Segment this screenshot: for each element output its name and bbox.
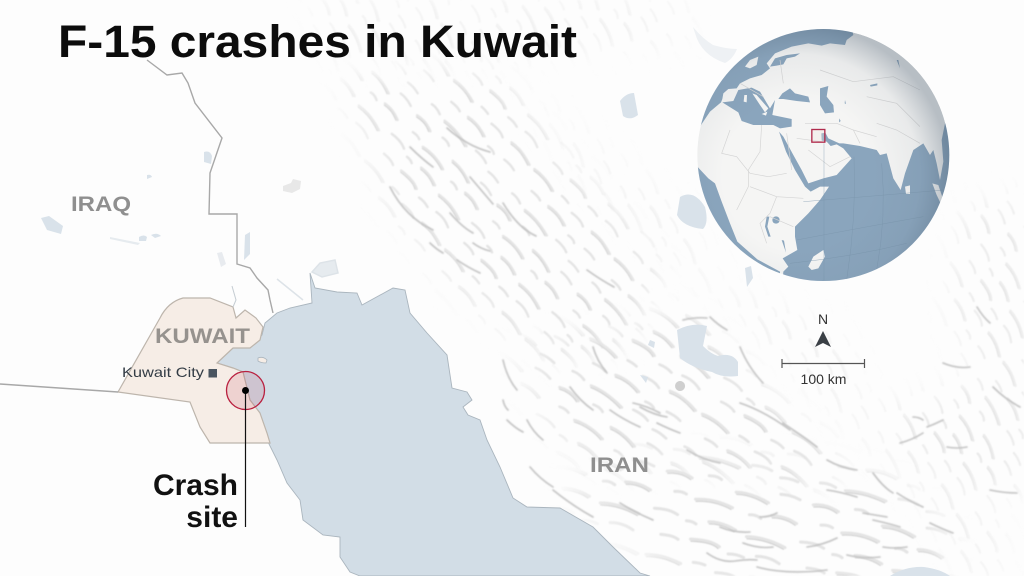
label: Kuwait: KUWAIT (155, 325, 250, 348)
scale bar: 100 km (801, 371, 846, 387)
title: F-15 crashes in Kuwait (58, 16, 577, 67)
label: Crash site: site (186, 501, 238, 534)
north arrow: N (818, 311, 828, 327)
globe shading (697, 29, 949, 281)
label: Kuwait City: Kuwait City (122, 364, 204, 380)
globe oceans (698, 29, 950, 281)
globe location box (812, 129, 825, 142)
globe islands (744, 57, 943, 270)
Kuwait territory (118, 298, 270, 443)
marsh outline (277, 260, 338, 300)
locator globe (698, 29, 950, 281)
label: Iran: IRAN (590, 454, 649, 477)
north arrow (815, 311, 831, 347)
label: Crash site (153, 469, 238, 534)
Failaka island (258, 357, 267, 363)
Persian Gulf (217, 273, 650, 576)
international borders (0, 60, 273, 392)
label: Crash site: Crash (153, 469, 238, 502)
scale bar (782, 359, 864, 387)
globe graticule (790, 143, 943, 280)
terrain: mountain shading (344, 6, 1024, 576)
crash site marker (226, 372, 264, 527)
globe borders (722, 60, 920, 243)
marker: Kuwait City (208, 369, 217, 378)
label: Iraq: IRAQ (71, 193, 131, 216)
globe land base (697, 29, 949, 281)
